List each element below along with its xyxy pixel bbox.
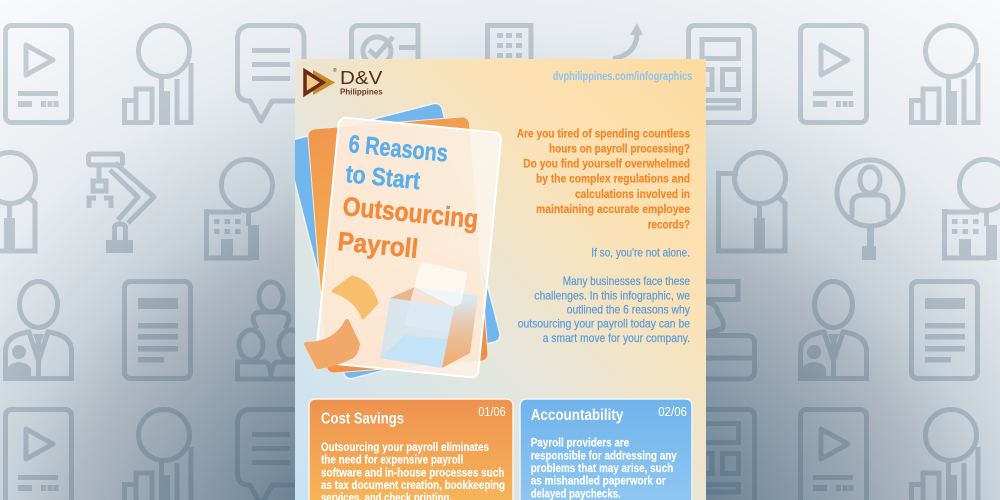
- text block: opening questions: [517, 126, 690, 231]
- text block: opening questions: hours on payroll processing?: [549, 141, 690, 155]
- icon: speech bubble: [238, 26, 304, 121]
- body: cost savings: the need for expensive payroll: [321, 455, 463, 467]
- illustration: stacked cards with title: [284, 102, 502, 380]
- icon: rising arrow: [613, 23, 643, 59]
- title: Outsourcing Payroll: Outsourcing: [341, 191, 480, 234]
- icon: speech bubble: [238, 410, 304, 500]
- logo: D&V Philippines: [305, 67, 383, 96]
- text block: introduction: challenges. In this infographic, we: [534, 288, 690, 302]
- body: accountability: delayed paychecks.: [531, 488, 621, 500]
- heading: Accountability: Accountability: [531, 407, 623, 424]
- body: cost savings: software and in-house processes such: [321, 467, 504, 479]
- shape: yellow paper: [333, 277, 377, 318]
- icon: video document: [6, 410, 72, 500]
- icon: form layout: [688, 26, 754, 122]
- body: cost savings: Outsourcing your payroll eliminates: [321, 442, 489, 454]
- text block: opening questions: records?: [648, 217, 690, 231]
- body: cost savings: as tax document creation, bookkeeping: [321, 480, 505, 492]
- body: accountability: problems that may arise, such: [531, 463, 673, 475]
- title: 6 Reasons to Start: 6 Reasons: [347, 130, 449, 168]
- icon: video document: [6, 26, 72, 122]
- heading: Cost Savings: Cost Savings: [321, 410, 404, 427]
- text block: opening questions: Are you tired of spending countless: [517, 126, 690, 140]
- icon: chart magnifier: [122, 410, 191, 500]
- body: accountability: [531, 438, 677, 500]
- shape: orange paper: [306, 321, 358, 367]
- text block: introduction: Many businesses face these: [563, 274, 690, 288]
- text block: opening questions: calculations involved in: [575, 187, 690, 201]
- page number: 02/06: 02/06: [658, 404, 687, 419]
- logo: D&V Philippines: D&V: [340, 67, 383, 88]
- logo: D&V Philippines: Philippines: [340, 86, 383, 96]
- text block: not alone: If so, you're not alone.: [591, 246, 690, 260]
- text block: opening questions: maintaining accurate employee: [536, 202, 690, 216]
- orange back card: [307, 116, 489, 374]
- icon: document: [124, 282, 190, 378]
- icon: video document: [800, 26, 866, 122]
- text block: introduction: outsourcing your payroll today can be: [518, 317, 690, 331]
- link: website: dvphilippines.com/infographics: [553, 71, 692, 83]
- logo: D&V Philippines: ®: [333, 67, 337, 74]
- icon: chart magnifier: [909, 26, 978, 125]
- icon: chart magnifier: [909, 410, 978, 500]
- text block: opening questions: by the complex regulations and: [536, 172, 690, 186]
- icon: office building: [488, 26, 531, 63]
- panel: infographic page: [284, 59, 706, 500]
- icon: person magnifier: [837, 160, 903, 260]
- title: Outsourcing Payroll: [338, 197, 478, 259]
- icon: manager: [6, 282, 72, 381]
- icon: building magnifier: [204, 160, 272, 260]
- page number: 01/06: 01/06: [478, 404, 506, 419]
- text block: introduction: [518, 274, 690, 345]
- text block: introduction: outlined the 6 reasons why: [567, 303, 690, 317]
- body: cost savings: [321, 442, 505, 500]
- title: 6 Reasons to Start: [346, 135, 448, 190]
- icon: document: [912, 282, 978, 378]
- title: 6 Reasons to Start: to Start: [344, 160, 422, 195]
- icon: document magnifier: [718, 152, 786, 253]
- icon: building magnifier: [942, 160, 1000, 260]
- glass front card: [315, 117, 502, 378]
- blue back card: [284, 102, 502, 380]
- icon: translucent box: [380, 262, 478, 368]
- body: accountability: as mishandled paperwork or: [531, 476, 666, 488]
- title: Outsourcing Payroll: Payroll: [336, 226, 419, 264]
- icon: video document: [800, 410, 866, 500]
- icon: stack with hand: [676, 282, 754, 379]
- icon: robot arm: [88, 154, 154, 253]
- body: accountability: Payroll providers are: [531, 438, 629, 450]
- body: accountability: responsible for addressing any: [531, 450, 677, 462]
- icon: chart magnifier: [122, 26, 191, 125]
- text block: opening questions: Do you find yourself overwhelmed: [523, 157, 690, 171]
- icon: document magnifier: [0, 152, 36, 253]
- panel: cost savings: [309, 399, 513, 500]
- icon: form layout: [688, 410, 754, 500]
- icon: checklist card: [352, 26, 419, 65]
- text block: introduction: a smart move for your company.: [543, 331, 690, 345]
- icon: manager: [800, 282, 866, 381]
- icon: team: [238, 282, 305, 379]
- panel: accountability: [520, 399, 692, 500]
